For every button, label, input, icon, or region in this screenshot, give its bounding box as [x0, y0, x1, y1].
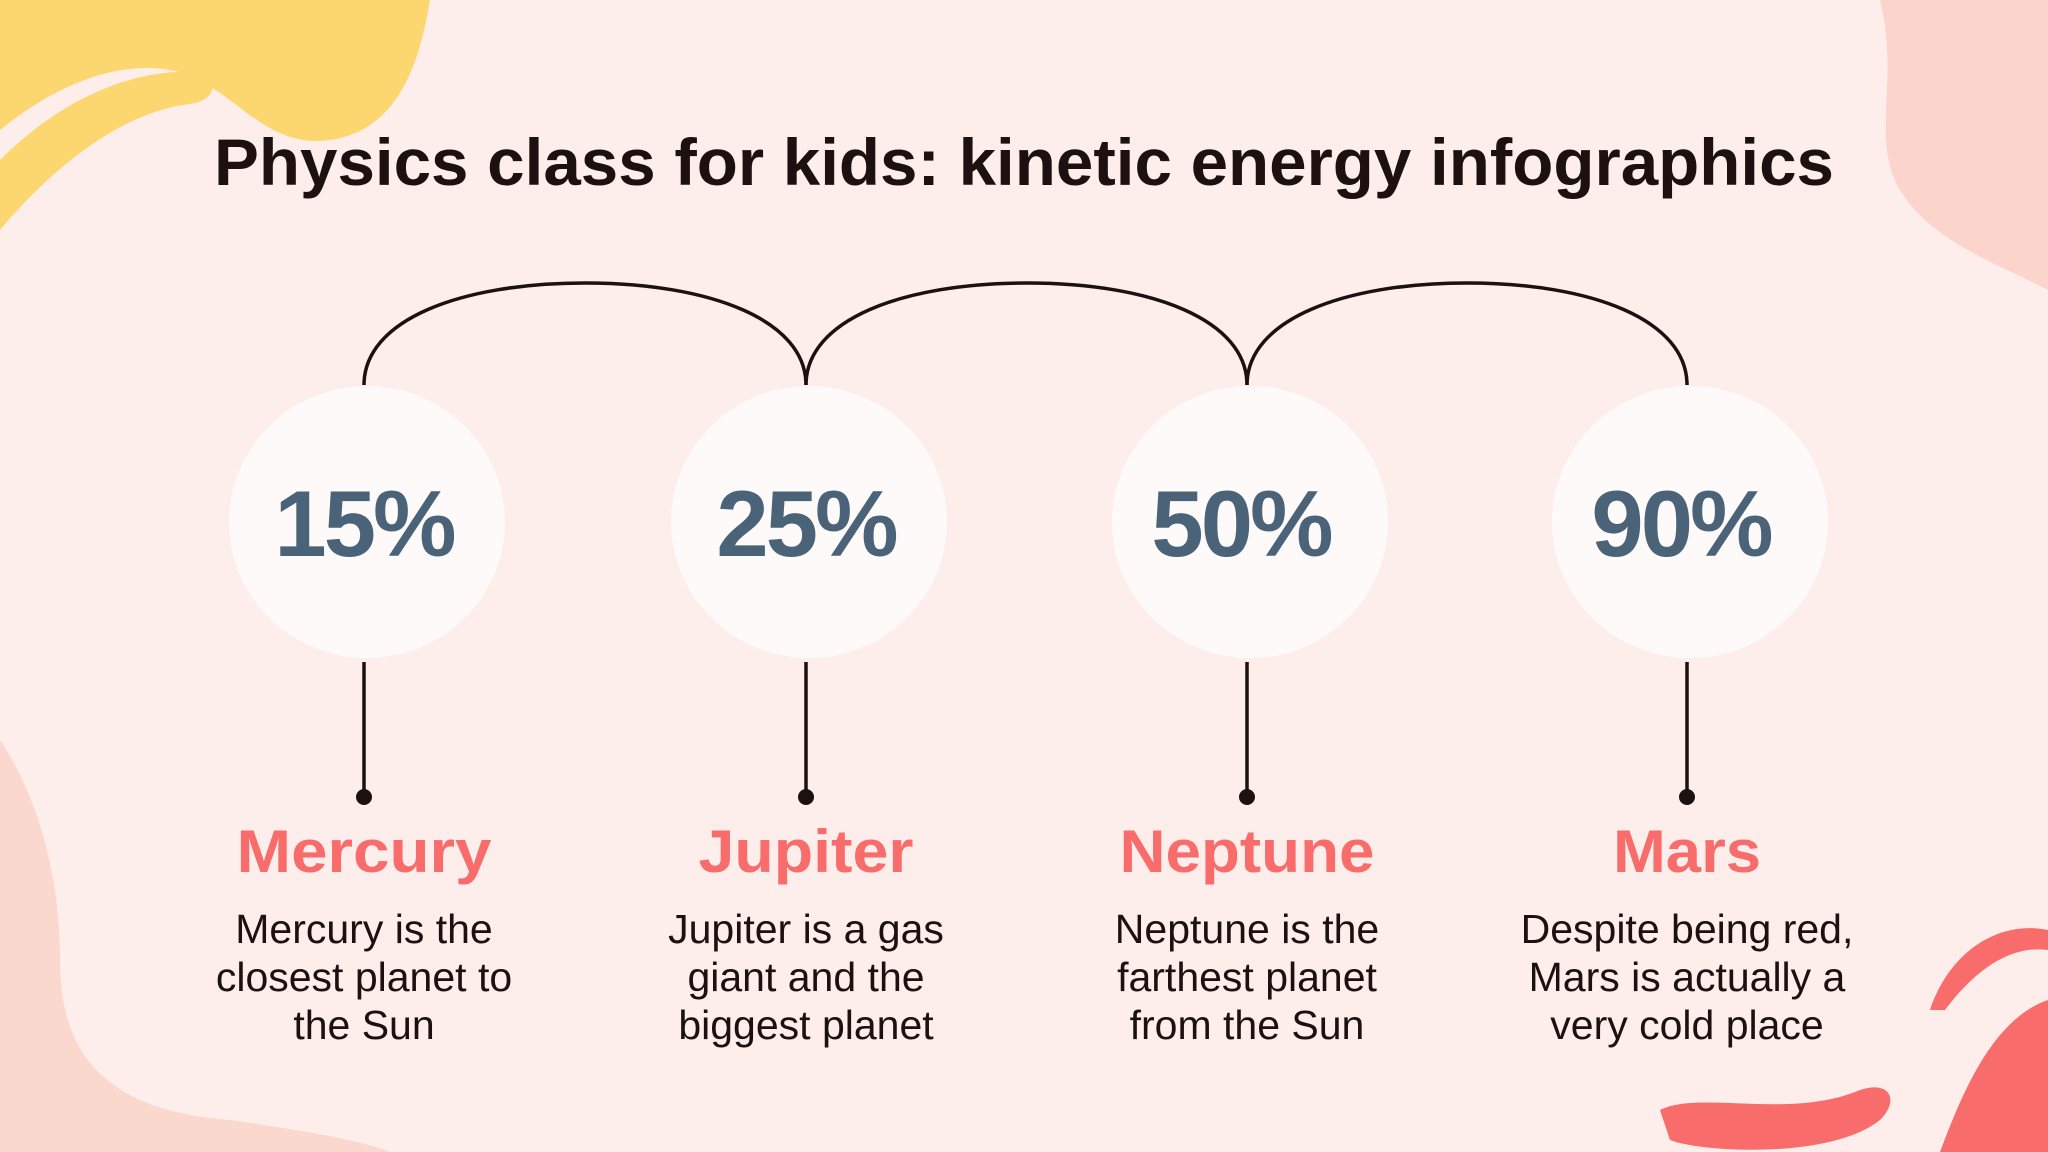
column: Jupiter: Jupiter is a gas	[668, 906, 944, 952]
column: Neptune: Neptune	[1120, 818, 1374, 885]
column: Mars: Mars is actually a	[1529, 954, 1846, 1000]
column: Mercury: Mercury	[236, 818, 492, 885]
column: Neptune: 50%	[1151, 471, 1332, 576]
column: Jupiter: biggest planet	[678, 1002, 934, 1048]
column: Mercury: the Sun	[293, 1002, 435, 1048]
column: Mars: Mars	[1613, 818, 1761, 885]
column: Mercury	[216, 386, 512, 1048]
column: Jupiter: Jupiter	[698, 818, 914, 885]
column: Mars: very cold place	[1550, 1002, 1824, 1048]
title: Physics class for kids: kinetic energy infographics	[214, 125, 1834, 199]
connector arcs	[364, 283, 1687, 385]
column: Jupiter	[668, 386, 947, 1048]
column: Mercury: Mercury is the	[235, 906, 493, 952]
column: Neptune	[1112, 386, 1388, 1048]
column: Jupiter: giant and the	[687, 954, 925, 1000]
column: Mars	[1521, 386, 1853, 1048]
column: Mars: 90%	[1591, 471, 1772, 576]
column: Mercury: closest planet to	[216, 954, 512, 1000]
column: Neptune: Neptune is the	[1115, 906, 1379, 952]
column: Jupiter: 25%	[716, 471, 897, 576]
column: Mars: Despite being red,	[1521, 906, 1853, 952]
column: Mercury: 15%	[274, 471, 455, 576]
column: Neptune: farthest planet	[1117, 954, 1378, 1000]
column: Neptune: from the Sun	[1130, 1002, 1364, 1048]
